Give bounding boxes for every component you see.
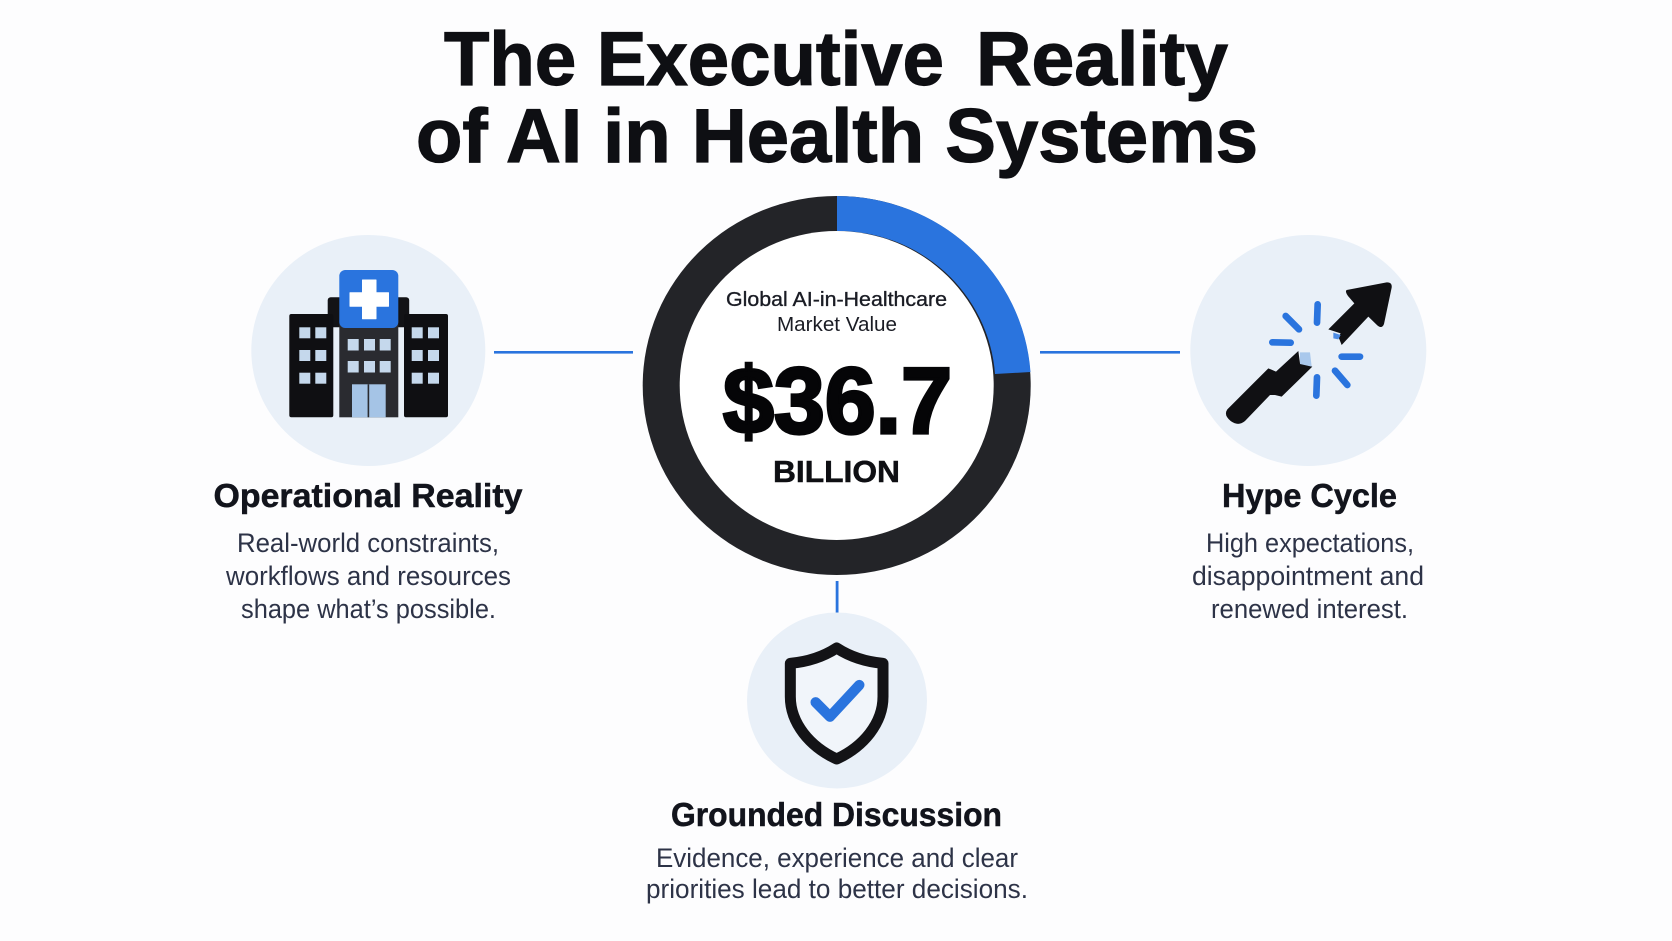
ring inner xyxy=(680,231,994,540)
title: The Executive xyxy=(444,17,944,102)
icon: hospital xyxy=(251,235,485,466)
heading: Grounded Discussion xyxy=(671,796,1002,833)
panel: market value ring xyxy=(643,196,1031,575)
icon: shield check xyxy=(747,612,927,788)
description: Evidence, experience and clear xyxy=(656,843,1018,873)
panel: grounded discussion xyxy=(646,612,1028,904)
description xyxy=(646,843,1028,904)
description: workflows and resources xyxy=(225,561,511,591)
icon: broken arrow xyxy=(1190,235,1426,466)
description: High expectations, xyxy=(1206,528,1414,558)
title: Reality xyxy=(976,17,1228,102)
title: of AI in Health Systems xyxy=(416,94,1258,179)
market label xyxy=(726,288,947,336)
heading: Hype Cycle xyxy=(1222,477,1397,514)
ring blue segment xyxy=(837,196,1030,374)
description xyxy=(1192,528,1424,624)
description: shape what’s possible. xyxy=(241,594,496,624)
title xyxy=(416,17,1258,179)
market label: Global AI-in-Healthcare xyxy=(726,288,947,311)
description: priorities lead to better decisions. xyxy=(646,874,1028,904)
description: disappointment and xyxy=(1192,561,1424,591)
market number: $36.7 xyxy=(723,348,952,453)
ring track xyxy=(643,196,1031,575)
description: Real-world constraints, xyxy=(237,528,499,558)
market unit: BILLION xyxy=(773,454,900,489)
description xyxy=(225,528,511,624)
description: renewed interest. xyxy=(1211,594,1408,624)
connector: left xyxy=(494,351,633,354)
connector: bottom xyxy=(836,581,838,613)
panel: operational reality xyxy=(214,235,523,624)
heading: Operational Reality xyxy=(214,477,523,514)
connector: right xyxy=(1040,351,1180,354)
panel: hype cycle xyxy=(1190,235,1426,624)
market label: Market Value xyxy=(777,313,897,336)
